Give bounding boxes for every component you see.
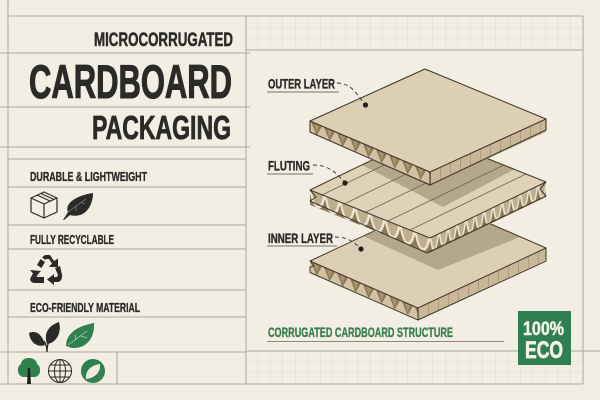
icon: green leaf xyxy=(66,323,94,348)
label: outer layer xyxy=(267,76,368,108)
icon: green circle leaf xyxy=(81,359,105,383)
feature: eco-friendly material xyxy=(29,300,140,352)
exploded layers diagram xyxy=(310,69,546,320)
label: fluting xyxy=(267,158,348,186)
feature heading: DURABLE & LIGHTWEIGHT xyxy=(30,169,147,184)
icon: box xyxy=(31,192,57,218)
icon: black leaf xyxy=(63,193,93,220)
inner layer top surface xyxy=(310,201,546,308)
fluting right edge waves xyxy=(430,182,546,253)
title line: packaging: PACKAGING xyxy=(92,109,231,146)
fluting left edge waves xyxy=(310,190,430,253)
feature: fully recyclable xyxy=(30,232,114,285)
outer layer left edge flutes xyxy=(310,121,430,184)
label: outer layer: OUTER LAYER xyxy=(268,76,335,92)
title line: cardboard: CARDBOARD xyxy=(29,56,232,109)
icon: globe xyxy=(48,360,72,382)
label: inner layer: INNER LAYER xyxy=(268,230,333,246)
layer: fluting board xyxy=(310,134,546,253)
badge: 100% eco: 100% xyxy=(523,318,564,340)
title xyxy=(29,29,233,146)
fluting top surface xyxy=(310,134,546,238)
badge: 100% eco: ECO xyxy=(525,337,563,364)
layer: inner layer board xyxy=(310,201,546,320)
layer: outer layer board xyxy=(310,69,546,185)
title line: microcorrugated: MICROCORRUGATED xyxy=(94,29,233,51)
feature heading: ECO-FRIENDLY MATERIAL xyxy=(30,300,140,315)
fluting cast shadow xyxy=(362,134,515,207)
badge: 100% eco xyxy=(518,311,571,365)
caption: corrugated cardboard structure: CORRUGATED CARDBOARD STRUCTURE xyxy=(268,324,453,340)
icon: tree xyxy=(18,358,40,384)
label: fluting: FLUTING xyxy=(268,158,310,174)
outer layer right edge xyxy=(430,119,546,185)
icon: black sprout xyxy=(29,322,60,352)
feature heading: FULLY RECYCLABLE xyxy=(30,232,114,247)
inner layer cast shadow xyxy=(363,201,520,270)
inner layer left edge flutes xyxy=(310,261,418,319)
inner layer right edge xyxy=(418,248,546,320)
icon: recycling symbol xyxy=(30,255,62,285)
footer icons xyxy=(18,358,105,384)
outer layer top surface xyxy=(310,69,546,172)
feature: durable and lightweight xyxy=(30,169,147,220)
